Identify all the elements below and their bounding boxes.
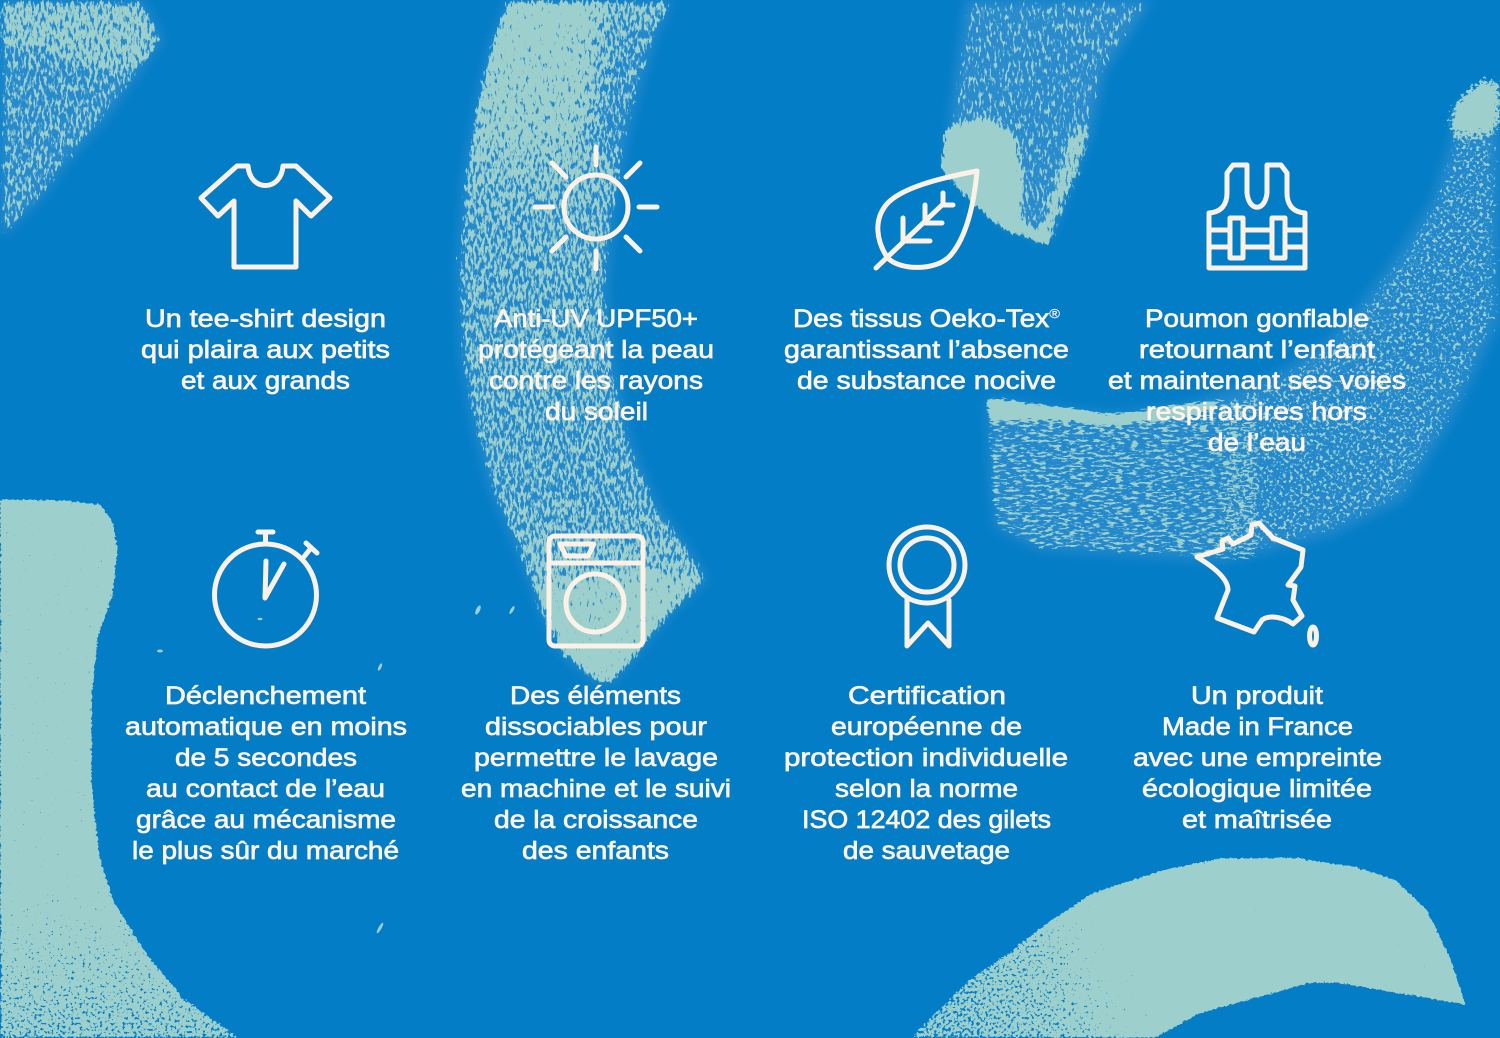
icon: stopwatch <box>214 532 317 646</box>
brush stroke: right curve <box>986 78 1500 562</box>
text: trigger: Déclenchement <box>165 682 366 710</box>
paint flecks <box>157 605 516 934</box>
text: certification: Certification <box>848 682 1006 710</box>
text: Oeko-Tex: garantissant l’absence <box>784 336 1069 364</box>
text: washable: des enfants <box>522 837 669 865</box>
text: washable: dissociables pour <box>485 713 707 741</box>
text: washable: permettre le lavage <box>474 744 718 772</box>
text: certification: protection individuelle <box>784 744 1068 772</box>
panel: certification <box>784 527 1068 865</box>
text: washable: de la croissance <box>494 806 698 834</box>
brush stroke: centre arc <box>457 0 708 683</box>
panel: made in France <box>1133 523 1382 834</box>
text: trigger: au contact de l’eau <box>146 775 385 803</box>
text: float: et maintenant ses voies <box>1108 367 1406 395</box>
text: trigger: de 5 secondes <box>175 744 357 772</box>
text: washable <box>461 682 731 865</box>
text: trigger: automatique en moins <box>125 713 407 741</box>
text: trigger: le plus sûr du marché <box>132 837 399 865</box>
text: tee-shirt: et aux grands <box>181 367 350 395</box>
text: certification: selon la norme <box>835 775 1018 803</box>
text: tee-shirt: Un tee-shirt design <box>145 305 386 333</box>
text: Oeko-Tex: Des tissus Oeko-Tex <box>793 305 1022 333</box>
text: washable: en machine et le suivi <box>461 775 731 803</box>
icon: life vest <box>1209 165 1305 268</box>
text: made in France: écologique limitée <box>1142 775 1372 803</box>
text: tee-shirt <box>141 305 390 395</box>
panel: tee-shirt design <box>141 166 390 395</box>
text: Oeko-Tex: de substance nocive <box>797 367 1056 395</box>
text: washable: Des éléments <box>510 682 681 710</box>
text: made in France: et maîtrisée <box>1182 806 1332 834</box>
icon: award rosette <box>889 527 965 646</box>
text: float: Poumon gonflable <box>1145 305 1369 333</box>
text: anti-UV: protégeant la peau <box>478 336 714 364</box>
text: anti-UV <box>478 305 714 426</box>
panel: Oeko-Tex fabrics <box>784 171 1069 395</box>
text: anti-UV: Anti-UV UPF50+ <box>494 305 698 333</box>
text: certification: européenne de <box>831 713 1022 741</box>
text: made in France <box>1133 682 1382 834</box>
text: anti-UV: contre les rayons <box>489 367 703 395</box>
icon: tee-shirt <box>201 166 330 267</box>
text: certification: ISO 12402 des gilets <box>802 806 1051 834</box>
text: made in France: Un produit <box>1191 682 1323 710</box>
text: Oeko-Tex <box>784 305 1069 395</box>
text: made in France: Made in France <box>1162 713 1353 741</box>
text: tee-shirt: qui plaira aux petits <box>141 336 390 364</box>
brush stroke: bottom right <box>909 858 1466 1038</box>
icon: map of France <box>1197 523 1316 645</box>
text: trigger <box>125 682 407 865</box>
text: certification <box>784 682 1068 865</box>
icon: leaf <box>876 171 977 268</box>
text: float: retournant l’enfant <box>1139 336 1375 364</box>
text: float <box>1108 305 1406 457</box>
panel: inflatable float <box>1108 165 1406 457</box>
panel: anti-UV <box>478 147 714 426</box>
brush stroke: bottom left <box>0 499 240 1038</box>
icon: washing machine <box>549 536 643 646</box>
text: certification: de sauvetage <box>843 837 1010 865</box>
text: float: respiratoires hors <box>1146 398 1367 426</box>
brush stroke: top left <box>0 0 163 235</box>
panel: automatic trigger <box>125 532 407 865</box>
text: Oeko-Tex: ® <box>1049 306 1060 321</box>
panel: washable parts <box>461 536 731 865</box>
brush stroke: top right <box>940 0 1152 246</box>
text: float: de l’eau <box>1208 429 1306 457</box>
text: trigger: grâce au mécanisme <box>136 806 396 834</box>
text: made in France: avec une empreinte <box>1133 744 1382 772</box>
icon: sun <box>535 147 657 269</box>
text: anti-UV: du soleil <box>545 398 648 426</box>
